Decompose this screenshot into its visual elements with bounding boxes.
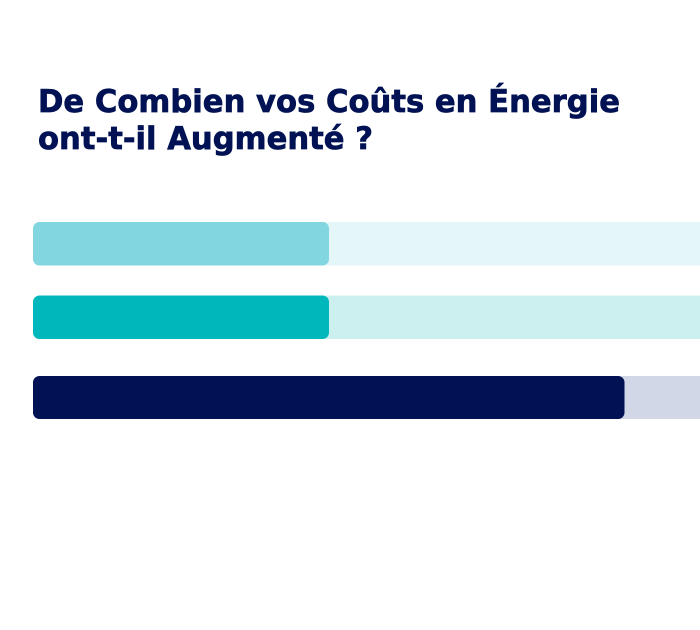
bar 2: teal <box>33 296 700 339</box>
title <box>38 84 620 157</box>
bar 3: navy <box>33 376 700 419</box>
title: ont-t-il Augmenté ? <box>38 121 373 157</box>
title: De Combien vos Coûts en Énergie <box>38 84 620 120</box>
bar 1: light blue <box>33 222 700 266</box>
